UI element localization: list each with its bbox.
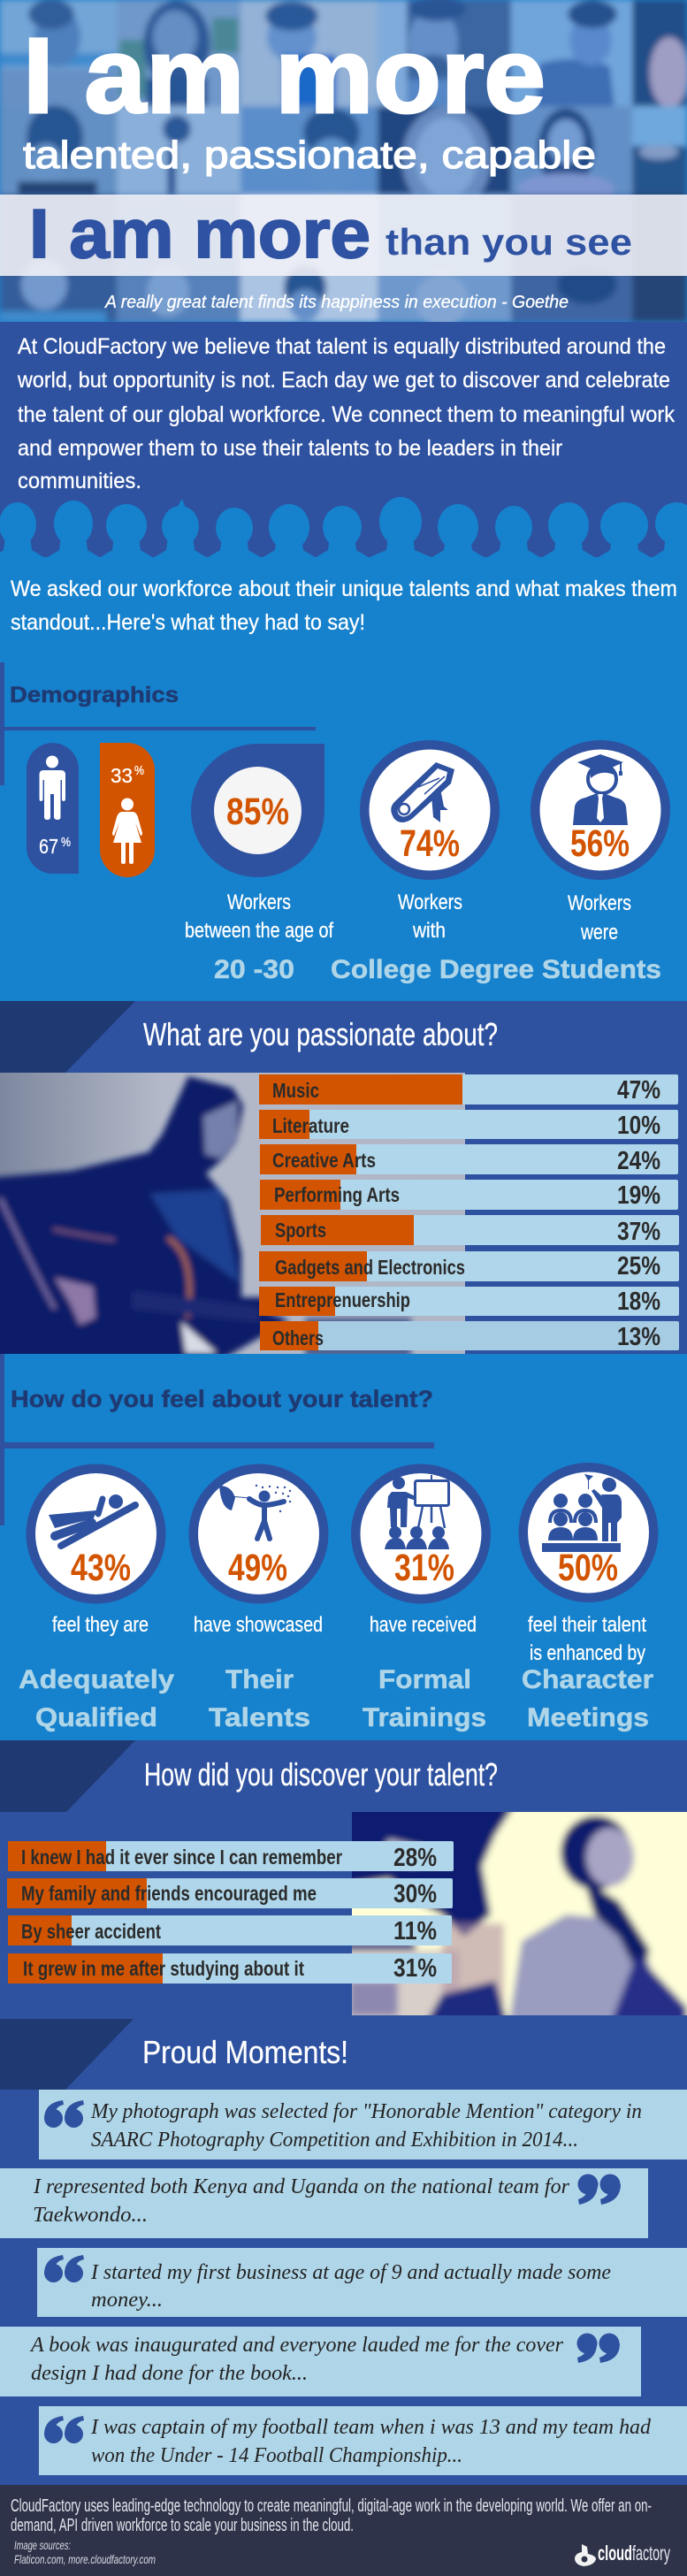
bar: Others: 13% xyxy=(617,1323,660,1351)
male share pill: % xyxy=(61,835,71,850)
stat: 49% showcased talents: Talents xyxy=(209,1703,310,1732)
stat: 43% adequately qualified: Adequately xyxy=(19,1665,174,1694)
icon: opening quote xyxy=(44,2416,84,2443)
image sources xyxy=(14,2538,156,2566)
icon: woman xyxy=(112,798,142,864)
quote 1: SAARC Photography Competition and Exhibition in 2014... xyxy=(91,2129,578,2152)
bar: Music: 47% xyxy=(617,1076,660,1105)
bar: Entreprenuership xyxy=(259,1287,679,1316)
survey intro text: standout...Here's what they had to say! xyxy=(11,610,365,635)
quote 1 xyxy=(39,2090,687,2159)
icon: meeting xyxy=(542,1474,622,1552)
intro panel xyxy=(0,322,687,561)
stat: 85% aged 20-30: 20 -30 xyxy=(214,955,294,984)
stat: 31% formal trainings xyxy=(351,1464,491,1732)
icon: opening quote xyxy=(44,2100,84,2128)
intro text: and empower them to use their talents to be leaders in their xyxy=(18,436,562,461)
male share pill xyxy=(27,743,79,874)
bar: by accident: 11% xyxy=(393,1917,437,1945)
stat: 43% adequately qualified: 43% xyxy=(71,1547,131,1589)
stat: 49% showcased talents xyxy=(189,1464,329,1732)
bar: after studying xyxy=(8,1953,452,1984)
bar: Creative Arts: 24% xyxy=(617,1147,660,1175)
quote 4: design I had done for the book... xyxy=(31,2362,308,2385)
hero section xyxy=(0,0,687,327)
quote 5: I was captain of my football team when i was 13 and my team had xyxy=(90,2416,652,2439)
demographics heading xyxy=(0,662,316,785)
stat: 74% college degree: 74% xyxy=(400,822,460,865)
footer xyxy=(0,2485,687,2576)
bar: Gadgets and Electronics: Gadgets and Electronics xyxy=(275,1256,465,1279)
bar: Literature xyxy=(259,1110,678,1140)
photo: young woman xyxy=(352,1812,687,2015)
section band: passions xyxy=(0,1001,687,1354)
bar: by accident: By sheer accident xyxy=(21,1920,161,1943)
stat: 43% adequately qualified: Qualified xyxy=(35,1703,157,1732)
quote: A really great talent finds its happiness in execution - Goethe xyxy=(104,293,569,312)
stat: 49% showcased talents: have showcased xyxy=(194,1613,323,1637)
quote 3: I started my first business at age of 9 and actually made some xyxy=(90,2261,611,2284)
stat: 50% character meetings: is enhanced by xyxy=(530,1641,645,1665)
bar: Performing Arts xyxy=(260,1180,678,1210)
talent heading xyxy=(0,1354,434,1525)
stat: 31% formal trainings: Formal xyxy=(378,1665,471,1694)
bar: by accident xyxy=(8,1915,452,1945)
quote 4: A book was inaugurated and everyone lauded me for the cover xyxy=(29,2334,564,2357)
bar: Music xyxy=(259,1074,678,1105)
stat: 85% aged 20-30: 85% xyxy=(226,791,289,833)
photo: guitarist xyxy=(0,1073,465,1366)
demographics heading: Demographics xyxy=(10,683,179,707)
footer description xyxy=(11,2496,652,2535)
sub headline: talented, passionate, capable xyxy=(23,134,596,177)
icon: diploma xyxy=(391,762,454,822)
stat: 49% showcased talents: 49% xyxy=(228,1547,287,1589)
hero photo mosaic xyxy=(0,0,687,327)
section heading: proud moments xyxy=(0,2019,348,2090)
stat: 56% students xyxy=(531,740,670,944)
female share pill: 33 xyxy=(111,764,133,787)
bar: Sports: Sports xyxy=(275,1219,326,1242)
survey intro text xyxy=(11,577,677,635)
bar: Literature: 10% xyxy=(617,1112,660,1140)
bar chart: passions xyxy=(259,1074,679,1351)
bar: Gadgets and Electronics xyxy=(259,1251,679,1281)
translucent banner: than you see xyxy=(385,221,632,263)
male share pill: 67 xyxy=(39,835,58,858)
bar: ever since I can remember: 28% xyxy=(393,1844,437,1872)
quote 5: won the Under - 14 Football Championship... xyxy=(91,2444,462,2467)
section band: discovery xyxy=(0,1740,687,2485)
translucent banner xyxy=(0,195,687,276)
crowd silhouettes xyxy=(0,497,687,561)
bar: Sports xyxy=(261,1215,679,1246)
bar: Music: Music xyxy=(272,1079,319,1102)
bar: Literature: Literature xyxy=(272,1114,349,1137)
stat: 50% character meetings xyxy=(518,1463,658,1732)
bar: Gadgets and Electronics: 25% xyxy=(617,1252,660,1280)
bar: after studying: It grew in me after studying about it xyxy=(23,1957,304,1980)
stat: 31% formal trainings: have received xyxy=(370,1613,477,1637)
section band: discovery: How did you discover your talent? xyxy=(144,1756,498,1792)
stat: 50% character meetings: 50% xyxy=(558,1547,618,1589)
bar: Sports: 37% xyxy=(617,1218,660,1246)
stat: 50% character meetings: Meetings xyxy=(527,1703,649,1732)
quote 5 xyxy=(39,2406,687,2475)
headline: I am more: I am more xyxy=(23,15,546,135)
bar: Entreprenuership: Entreprenuership xyxy=(275,1288,410,1311)
bar: Performing Arts: Performing Arts xyxy=(274,1183,400,1206)
bar: Others: Others xyxy=(272,1326,324,1349)
stat: 85% aged 20-30: between the age of xyxy=(185,919,333,943)
bar: Entreprenuership: 18% xyxy=(617,1288,660,1316)
stat: 49% showcased talents: Their xyxy=(225,1665,294,1694)
stat: 31% formal trainings: Trainings xyxy=(363,1703,486,1732)
translucent banner: I am more xyxy=(29,195,370,272)
bar: Others xyxy=(260,1321,679,1351)
callout: college degree students: College Degree Students xyxy=(331,955,661,984)
female share pill xyxy=(100,743,155,877)
bar: after studying: 31% xyxy=(393,1954,437,1983)
quote 1: My photograph was selected for "Honorable Mention" category in xyxy=(90,2100,642,2123)
stat: 74% college degree xyxy=(360,740,500,943)
icon: closing quote xyxy=(578,2174,621,2205)
stat: 74% college degree: with xyxy=(412,919,446,943)
bar: ever since I can remember: I knew I had it ever since I can remember xyxy=(21,1846,342,1869)
quote 3: money... xyxy=(91,2289,163,2312)
stat: 43% adequately qualified: feel they are xyxy=(52,1613,149,1637)
section heading: proud moments: Proud Moments! xyxy=(142,2034,348,2070)
quote 4 xyxy=(0,2327,641,2396)
quote 3 xyxy=(37,2248,687,2317)
icon: flying hero xyxy=(49,1494,135,1546)
stat: 43% adequately qualified xyxy=(19,1464,174,1732)
logo: cloudfactory xyxy=(575,2542,670,2566)
stat: 56% students: Workers xyxy=(568,891,631,915)
image sources: Image sources: xyxy=(14,2538,71,2552)
quote 2 xyxy=(0,2168,648,2238)
section band: passions: What are you passionate about? xyxy=(143,1016,498,1052)
icon: man xyxy=(39,755,65,820)
stat: 85% aged 20-30: Workers xyxy=(227,891,291,914)
stat: 74% college degree: Workers xyxy=(398,891,462,914)
stat: 56% students: 56% xyxy=(570,822,630,865)
intro text xyxy=(17,334,675,493)
quote 2: I represented both Kenya and Uganda on the national team for xyxy=(33,2175,570,2198)
icon: graduate xyxy=(573,754,628,825)
icon: opening quote xyxy=(44,2255,84,2282)
icon: closing quote xyxy=(576,2333,620,2363)
logo: cloudfactory: cloud xyxy=(598,2542,632,2565)
bar: family and friends: 30% xyxy=(393,1880,437,1908)
bar: Performing Arts: 19% xyxy=(617,1181,660,1210)
stat: 50% character meetings: Character xyxy=(522,1665,653,1694)
bar chart: discovery xyxy=(7,1841,454,1984)
bar: family and friends xyxy=(7,1878,453,1908)
female share pill: % xyxy=(134,763,144,778)
quote 2: Taekwondo... xyxy=(33,2204,148,2227)
intro text: communities. xyxy=(18,469,141,493)
stat: 56% students: were xyxy=(580,921,618,944)
bar: family and friends: My family and friends encouraged me xyxy=(21,1882,317,1905)
bar: ever since I can remember xyxy=(8,1841,454,1872)
stat: 31% formal trainings: 31% xyxy=(394,1547,454,1589)
bar: Creative Arts xyxy=(260,1144,678,1175)
bar: Creative Arts: Creative Arts xyxy=(272,1149,376,1172)
image sources: Flaticon.com, more.cloudfactory.com xyxy=(14,2552,156,2566)
icon: person with umbrella in rain xyxy=(219,1485,291,1539)
stat: 85% aged 20-30 xyxy=(185,744,333,984)
stat: 50% character meetings: feel their talent xyxy=(528,1613,646,1637)
footer description: demand, API driven workforce to scale your business in the cloud. xyxy=(11,2516,354,2535)
talent heading: How do you feel about your talent? xyxy=(11,1386,433,1412)
icon: presenter and audience xyxy=(385,1475,449,1549)
